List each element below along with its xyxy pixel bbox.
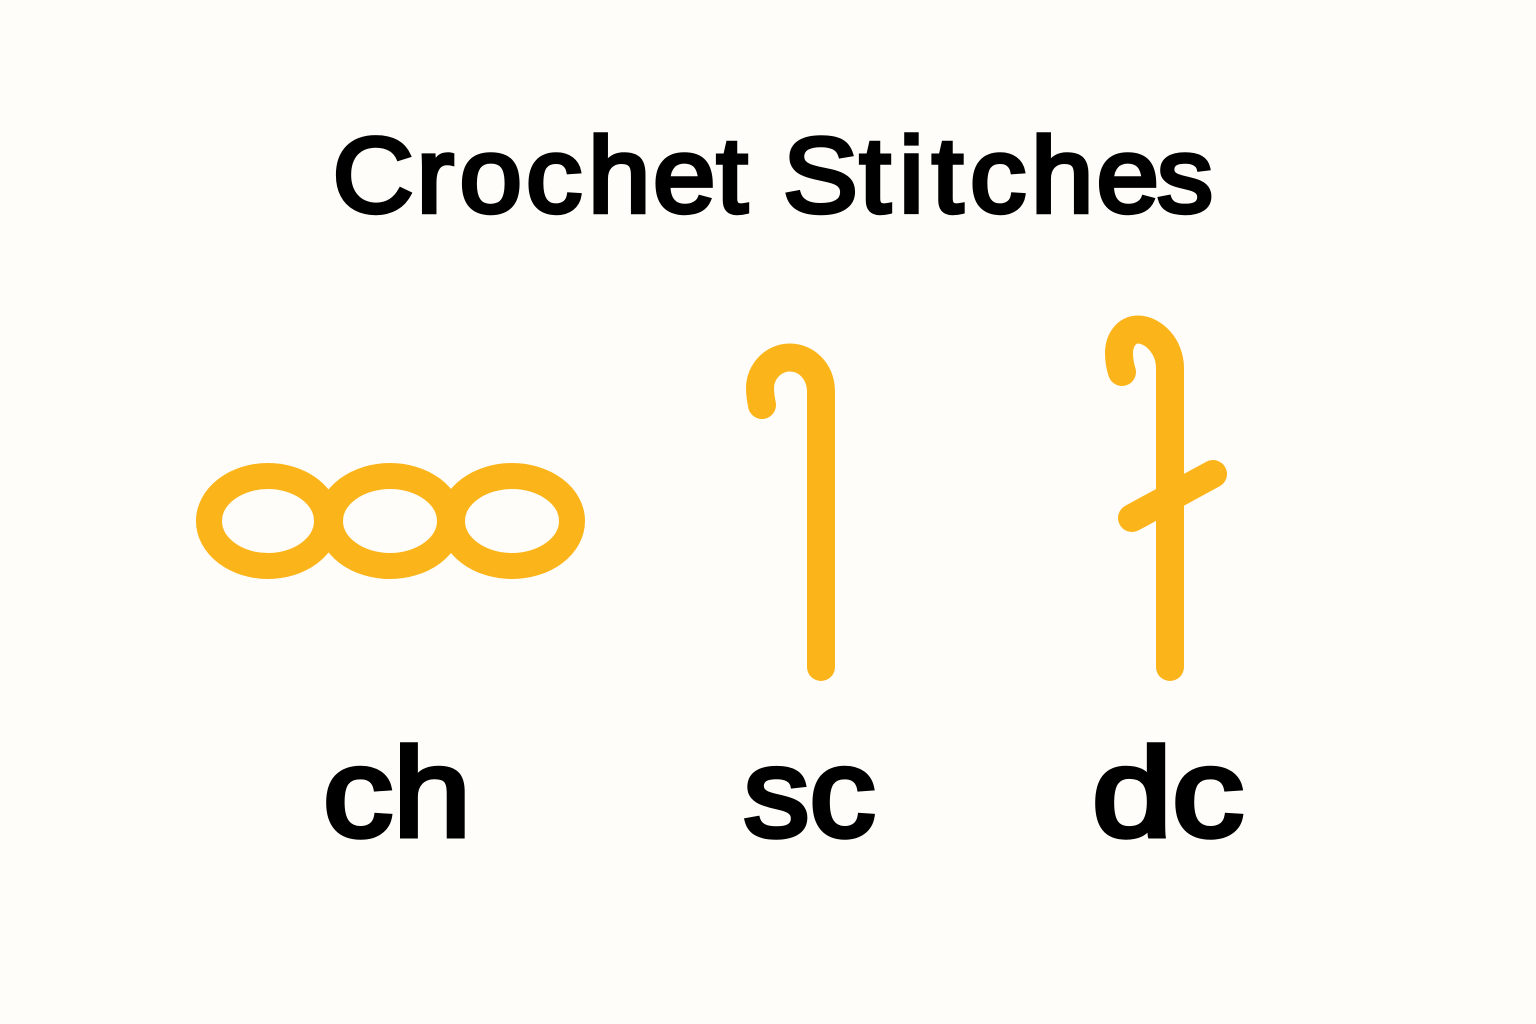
label: dc: dc xyxy=(1092,722,1244,863)
label: sc: sc xyxy=(744,722,876,863)
icon: single crochet stitch xyxy=(760,358,821,667)
icon: double crochet stitch xyxy=(1119,330,1213,667)
icon: chain stitch xyxy=(209,476,572,566)
title: Crochet Stitches xyxy=(333,116,1213,235)
label: ch: ch xyxy=(323,722,471,863)
